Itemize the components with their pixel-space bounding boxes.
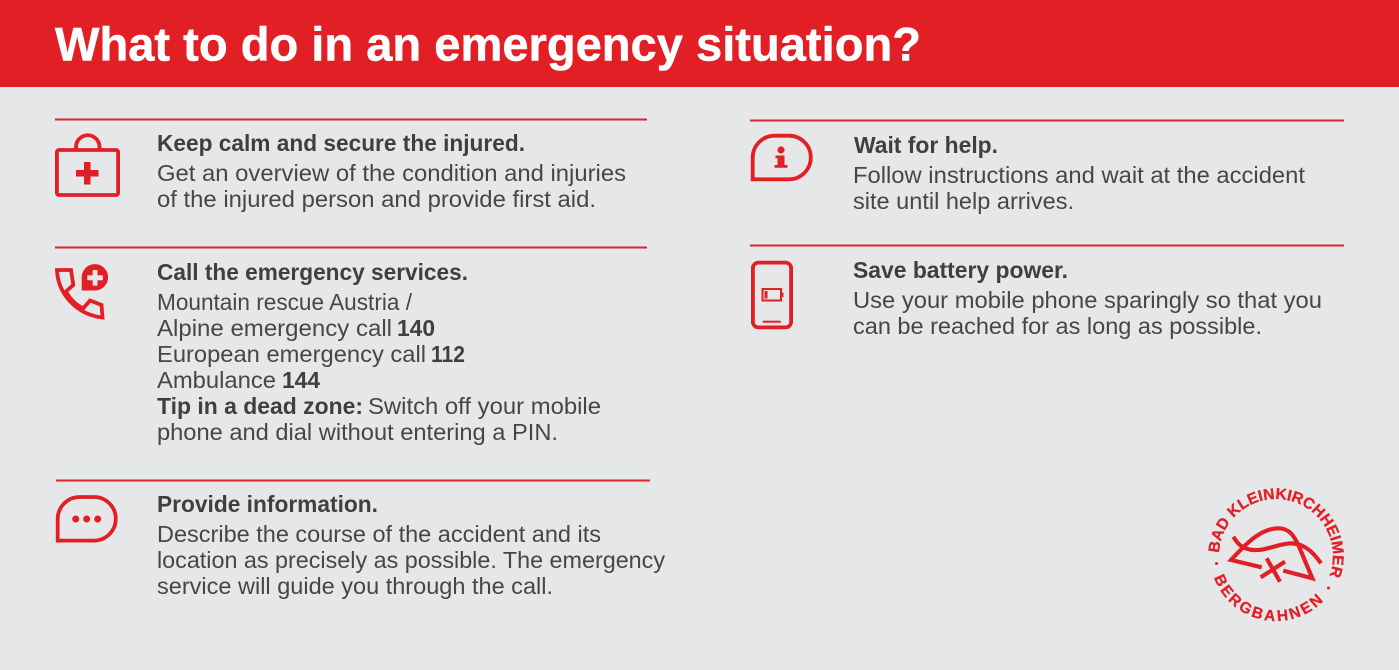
icon: phone with medical plus: [57, 264, 108, 318]
text block: save battery power: Use your mobile phone sparingly so that you: [853, 287, 1322, 313]
text block: provide information: service will guide you through the call.: [157, 573, 553, 599]
text block: keep calm: Keep calm and secure the injured.: [157, 130, 525, 156]
text block: keep calm: Get an overview of the condition and injuries: [157, 160, 626, 186]
text block: provide information: Describe the course of the accident and its: [157, 521, 601, 547]
text block: call emergency services: Call the emergency services.: [157, 259, 468, 285]
text block: keep calm: [157, 130, 626, 212]
text block: save battery power: [853, 257, 1322, 339]
text block: wait for help: Follow instructions and wait at the accident: [853, 162, 1306, 188]
text block: call emergency services: 144: [282, 367, 320, 393]
icon: first aid kit: [57, 135, 118, 195]
text block: call emergency services: Alpine emergency call: [157, 315, 392, 341]
text block: call emergency services: [157, 259, 601, 445]
logo: Bad Kleinkirchheim Bergbahnen: BAD KLEINKIRCHHEIMER: [1208, 488, 1344, 578]
text block: wait for help: Wait for help.: [854, 132, 998, 158]
text block: provide information: Provide information.: [157, 491, 378, 517]
text block: call emergency services: Tip in a dead zone:: [157, 393, 363, 419]
text block: wait for help: [853, 132, 1306, 214]
text block: provide information: location as precisely as possible. The emergency: [157, 547, 665, 573]
icon: speech bubble with dots: [58, 497, 116, 541]
text block: wait for help: site until help arrives.: [853, 188, 1074, 214]
text block: call emergency services: phone and dial without entering a PIN.: [157, 419, 558, 445]
text block: keep calm: of the injured person and provide first aid.: [157, 186, 596, 212]
text block: call emergency services: 140: [397, 315, 435, 341]
text block: call emergency services: 112: [431, 341, 465, 367]
text block: call emergency services: Ambulance: [157, 367, 276, 393]
logo: Bad Kleinkirchheim Bergbahnen: BERGBAHNEN: [1214, 574, 1323, 622]
text block: provide information: [157, 491, 665, 599]
title: What to do in an emergency situation?: [55, 18, 921, 72]
text block: save battery power: Save battery power.: [853, 257, 1068, 283]
text block: call emergency services: Switch off your mobile: [368, 393, 601, 419]
logo: Bad Kleinkirchheim Bergbahnen: [1208, 488, 1344, 622]
text block: call emergency services: European emergency call: [157, 341, 426, 367]
text block: call emergency services: Mountain rescue Austria /: [157, 289, 413, 315]
icon: info bubble: [753, 136, 811, 179]
text block: save battery power: can be reached for as long as possible.: [853, 313, 1262, 339]
header banner: [0, 0, 1399, 87]
icon: mobile phone with low battery: [753, 263, 791, 327]
